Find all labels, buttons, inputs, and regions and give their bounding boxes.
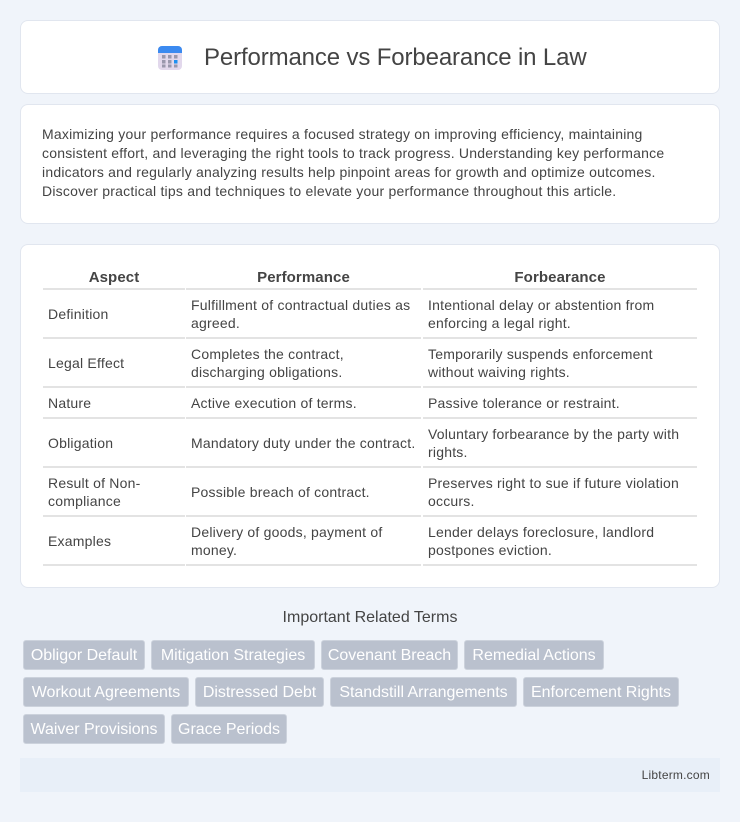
related term tags: Enforcement Rights bbox=[531, 684, 671, 701]
table rows: enforcing a legal right. bbox=[428, 315, 571, 331]
footer credit: Libterm.com bbox=[642, 768, 710, 782]
table rows: Preserves right to sue if future violation bbox=[428, 475, 679, 491]
table rows: without waiving rights. bbox=[428, 364, 570, 380]
table rows: compliance bbox=[48, 493, 121, 509]
table rows: Passive tolerance or restraint. bbox=[428, 395, 620, 411]
related term tags: Workout Agreements bbox=[32, 684, 180, 701]
table rows: Voluntary forbearance by the party with bbox=[428, 426, 679, 442]
intro text panel: Maximizing your performance requires a focused strategy on improving efficiency, maintaining bbox=[42, 126, 643, 142]
related term tags: Waiver Provisions bbox=[31, 721, 157, 738]
table rows: Completes the contract, bbox=[191, 346, 344, 362]
table rows: Nature bbox=[48, 395, 91, 411]
related term tags: Obligor Default bbox=[31, 647, 137, 664]
icon: calendar bbox=[158, 46, 182, 70]
table rows: Examples bbox=[48, 533, 111, 549]
table rows: Lender delays foreclosure, landlord bbox=[428, 524, 654, 540]
table rows: rights. bbox=[428, 444, 468, 460]
table header: Aspect bbox=[89, 269, 139, 286]
related term tags: Remedial Actions bbox=[472, 647, 596, 664]
table rows: Delivery of goods, payment of bbox=[191, 524, 382, 540]
related term tags bbox=[23, 640, 679, 744]
footer bbox=[20, 758, 720, 792]
table rows: Active execution of terms. bbox=[191, 395, 357, 411]
related term tags: Grace Periods bbox=[178, 721, 280, 738]
related term tags: Mitigation Strategies bbox=[161, 647, 305, 664]
table rows: Obligation bbox=[48, 435, 113, 451]
related term tags: Distressed Debt bbox=[203, 684, 316, 701]
header panel bbox=[20, 20, 720, 94]
table rows: Fulfillment of contractual duties as bbox=[191, 297, 410, 313]
table rows bbox=[43, 288, 697, 566]
table header bbox=[89, 269, 606, 286]
table rows: Definition bbox=[48, 306, 109, 322]
table header: Performance bbox=[257, 269, 350, 286]
table rows: postpones eviction. bbox=[428, 542, 552, 558]
related term tags: Covenant Breach bbox=[328, 647, 451, 664]
table rows: agreed. bbox=[191, 315, 240, 331]
related terms heading: Important Related Terms bbox=[283, 609, 457, 626]
table rows: Possible breach of contract. bbox=[191, 484, 370, 500]
table rows: Legal Effect bbox=[48, 355, 124, 371]
intro text panel: Discover practical tips and techniques to elevate your performance throughout this article. bbox=[42, 183, 616, 199]
table rows: discharging obligations. bbox=[191, 364, 342, 380]
comparison table panel bbox=[20, 244, 720, 588]
table rows: occurs. bbox=[428, 493, 475, 509]
table rows: Temporarily suspends enforcement bbox=[428, 346, 653, 362]
table rows: money. bbox=[191, 542, 237, 558]
intro text panel bbox=[20, 104, 720, 224]
table rows: Mandatory duty under the contract. bbox=[191, 435, 415, 451]
intro text panel: consistent effort, and leveraging the right tools to track progress. Understanding key performance bbox=[42, 145, 664, 161]
title: Performance vs Forbearance in Law bbox=[204, 44, 587, 71]
intro text panel: indicators and regularly analyzing results help pinpoint areas for growth and optimize outcomes. bbox=[42, 164, 656, 180]
table rows: Result of Non- bbox=[48, 475, 140, 491]
related term tags: Standstill Arrangements bbox=[339, 684, 508, 701]
table rows: Intentional delay or abstention from bbox=[428, 297, 654, 313]
table header: Forbearance bbox=[514, 269, 606, 286]
